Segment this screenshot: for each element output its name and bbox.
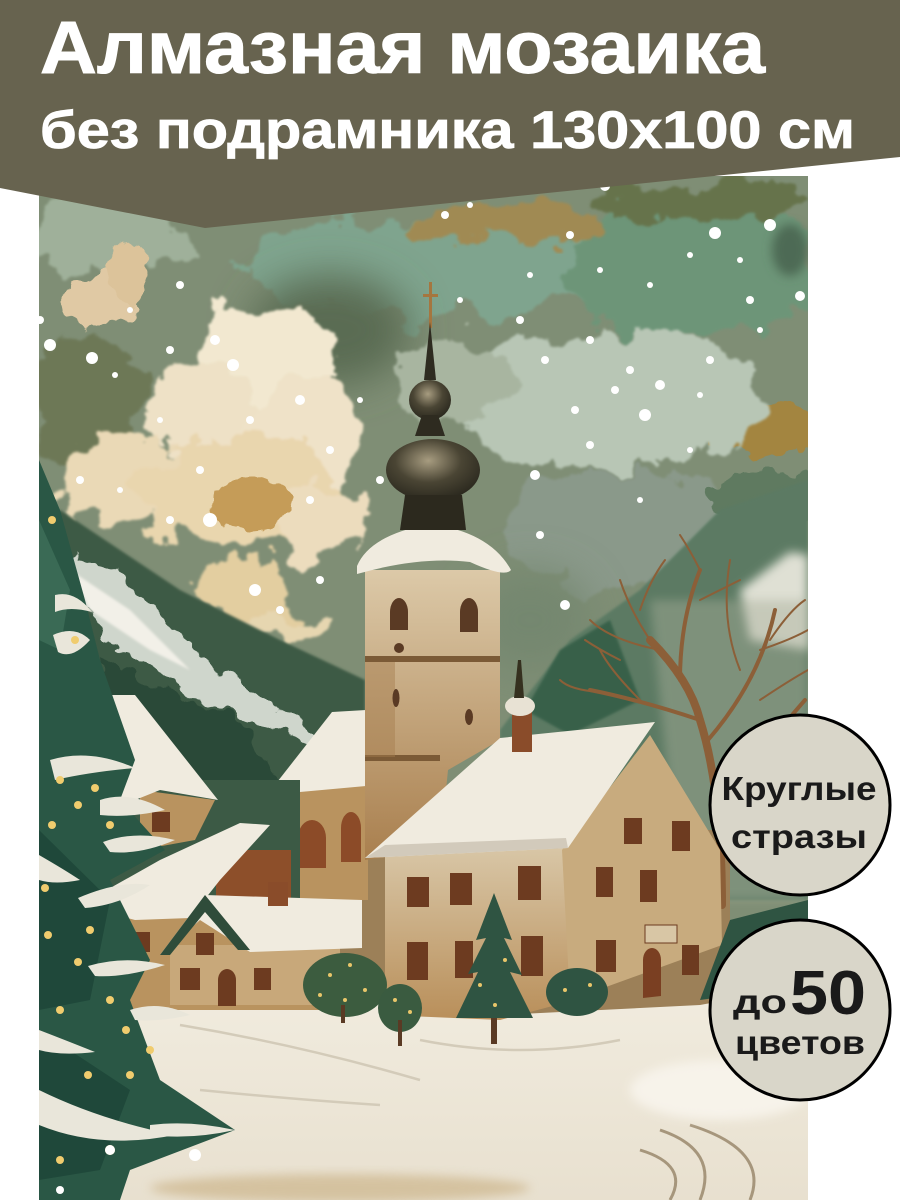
onion dome and spire (386, 282, 480, 530)
title line 2: без подрамника 130х100 см (40, 101, 855, 160)
bare winter tree (560, 535, 808, 905)
title line 1: Алмазная мозаика (40, 6, 766, 89)
top banner with title (0, 0, 900, 228)
falling snow dots (36, 181, 805, 1194)
badge: round rhinestones: Круглые (722, 770, 876, 807)
main church building (365, 660, 722, 1020)
badge: round rhinestones: стразы (731, 818, 867, 855)
badge: up to 50 colors: цветов (735, 1024, 865, 1061)
small trees and bushes (303, 893, 808, 1046)
snowy ground (120, 1003, 808, 1200)
left snowy mountain slope (60, 509, 365, 780)
large decorated fir tree (39, 460, 235, 1200)
badge: round rhinestones (710, 715, 890, 895)
painting: snowy village church (30, 176, 830, 1200)
bell tower (357, 524, 511, 860)
right mountains (500, 480, 808, 900)
back fill behind buildings (340, 830, 730, 1014)
cream cumulus cloud (60, 302, 368, 632)
badge: up to 50 colors: до (733, 983, 787, 1020)
sky with watercolor clouds (39, 176, 808, 920)
badge: up to 50 colors: 50 (790, 959, 866, 1028)
left village houses (112, 695, 362, 1010)
church left wing (278, 710, 368, 900)
badge: up to 50 colors (710, 920, 890, 1100)
golden cloud shadow (210, 479, 290, 531)
